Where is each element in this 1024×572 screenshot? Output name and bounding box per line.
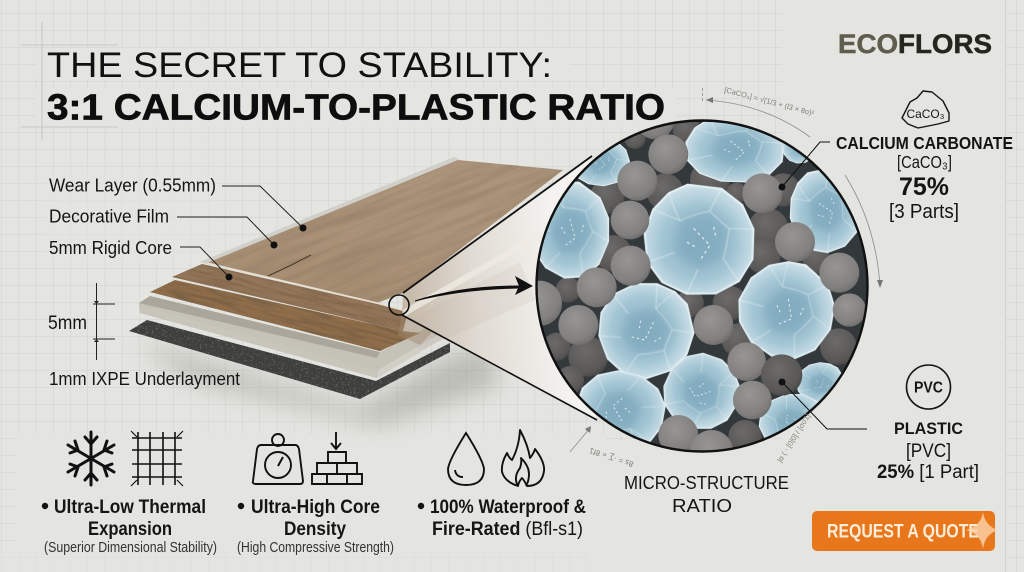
label: underlayment: 1mm IXPE Underlayment (49, 368, 240, 389)
text (42, 496, 217, 556)
formula annotations (570, 85, 883, 469)
text: Ultra-High Core (251, 496, 380, 518)
formula top: [CaCO₃] = √(1/3 + (l3 × 8o)² (723, 85, 816, 118)
plastic text (877, 419, 979, 483)
label: decorative film (49, 206, 278, 248)
micro-structure circle (535, 119, 869, 453)
text: (High Compressive Strength) (237, 540, 394, 556)
calcium text: [3 Parts] (889, 201, 959, 223)
background particles (543, 116, 857, 453)
right arc (845, 175, 880, 286)
plastic text: [PVC] (906, 441, 951, 462)
icon: contracting grid (131, 431, 183, 486)
label: wear layer: Wear Layer (0.55mm) (49, 174, 216, 196)
layer: decorative film (172, 264, 406, 331)
plank shadow (135, 340, 500, 425)
flooring plank stack (129, 157, 563, 432)
lower arrow (570, 428, 590, 452)
icon: snowflake (68, 432, 114, 485)
icon: PVC badge: PVC (914, 380, 943, 396)
formula bottom: 8s = ·∑ « 8f1 (588, 446, 635, 469)
text: Fire-Rated (Bfl-s1) (432, 518, 583, 540)
text (418, 496, 586, 540)
label: rigid core (49, 237, 232, 280)
calcium text: [CaCO₃] (897, 152, 952, 172)
layer: wood base (150, 280, 420, 351)
micro-structure caption: MICRO-STRUCTURE (624, 473, 789, 493)
panel: plastic (778, 365, 979, 483)
logo (838, 29, 992, 59)
icon: sparkle (966, 512, 998, 549)
text: 100% Waterproof & (430, 496, 586, 518)
feature: waterproof and fire rated (418, 430, 586, 540)
calcium carbonate crystals (516, 111, 866, 462)
label: decorative film: Decorative Film (49, 206, 169, 226)
label: 5mm dimension (48, 283, 115, 360)
layer: wear surface (200, 157, 563, 311)
formula right: |α ( ⋅ [0|0] / [σσ1] (775, 412, 812, 464)
icon: brick stack with arrow (312, 432, 362, 484)
text: Expansion (88, 518, 172, 540)
feature: thermal expansion (42, 431, 217, 556)
calcium text (836, 133, 1013, 223)
text: (Superior Dimensional Stability) (44, 540, 217, 556)
logo: ECO (838, 29, 898, 59)
text (237, 496, 394, 556)
plastic text: 25% [1 Part] (877, 462, 979, 483)
label: wear layer (49, 174, 306, 232)
PVC particles (538, 124, 866, 450)
feature: core density (237, 432, 394, 556)
label: rigid core: 5mm Rigid Core (49, 237, 172, 258)
icon: water drop (448, 433, 484, 485)
icon: CaCO3 rock (902, 91, 949, 128)
lens marker (389, 295, 409, 315)
title: 3:1 CALCIUM-TO-PLASTIC RATIO (47, 86, 665, 128)
calcium text: 75% (899, 173, 949, 201)
text: Ultra-Low Thermal (54, 496, 206, 518)
icon: flame (502, 430, 544, 486)
logo: FLORS (898, 29, 992, 59)
text: Density (284, 518, 346, 540)
title (47, 45, 665, 128)
label: 5mm dimension: 5mm (48, 313, 87, 334)
micro-structure caption (624, 473, 789, 516)
icon: weight scale (253, 434, 303, 484)
plastic text: PLASTIC (894, 419, 963, 438)
layer: rigid core (139, 296, 470, 378)
layer: IXPE underlayment (129, 320, 450, 399)
icon: PVC badge (906, 365, 950, 409)
arrow to micro-structure (415, 276, 533, 301)
callout line (778, 378, 867, 429)
magnifier wedge (398, 156, 597, 420)
layer callouts (48, 174, 306, 389)
callout line (778, 142, 830, 190)
micro-structure caption: RATIO (672, 496, 732, 516)
icon: CaCO3 rock: CaCO₃ (906, 107, 945, 121)
panel: calcium carbonate (778, 91, 1013, 223)
top arc (706, 100, 810, 137)
call to action button (812, 511, 998, 551)
call to action button: REQUEST A QUOTE (827, 520, 979, 542)
title: THE SECRET TO STABILITY: (47, 45, 552, 85)
